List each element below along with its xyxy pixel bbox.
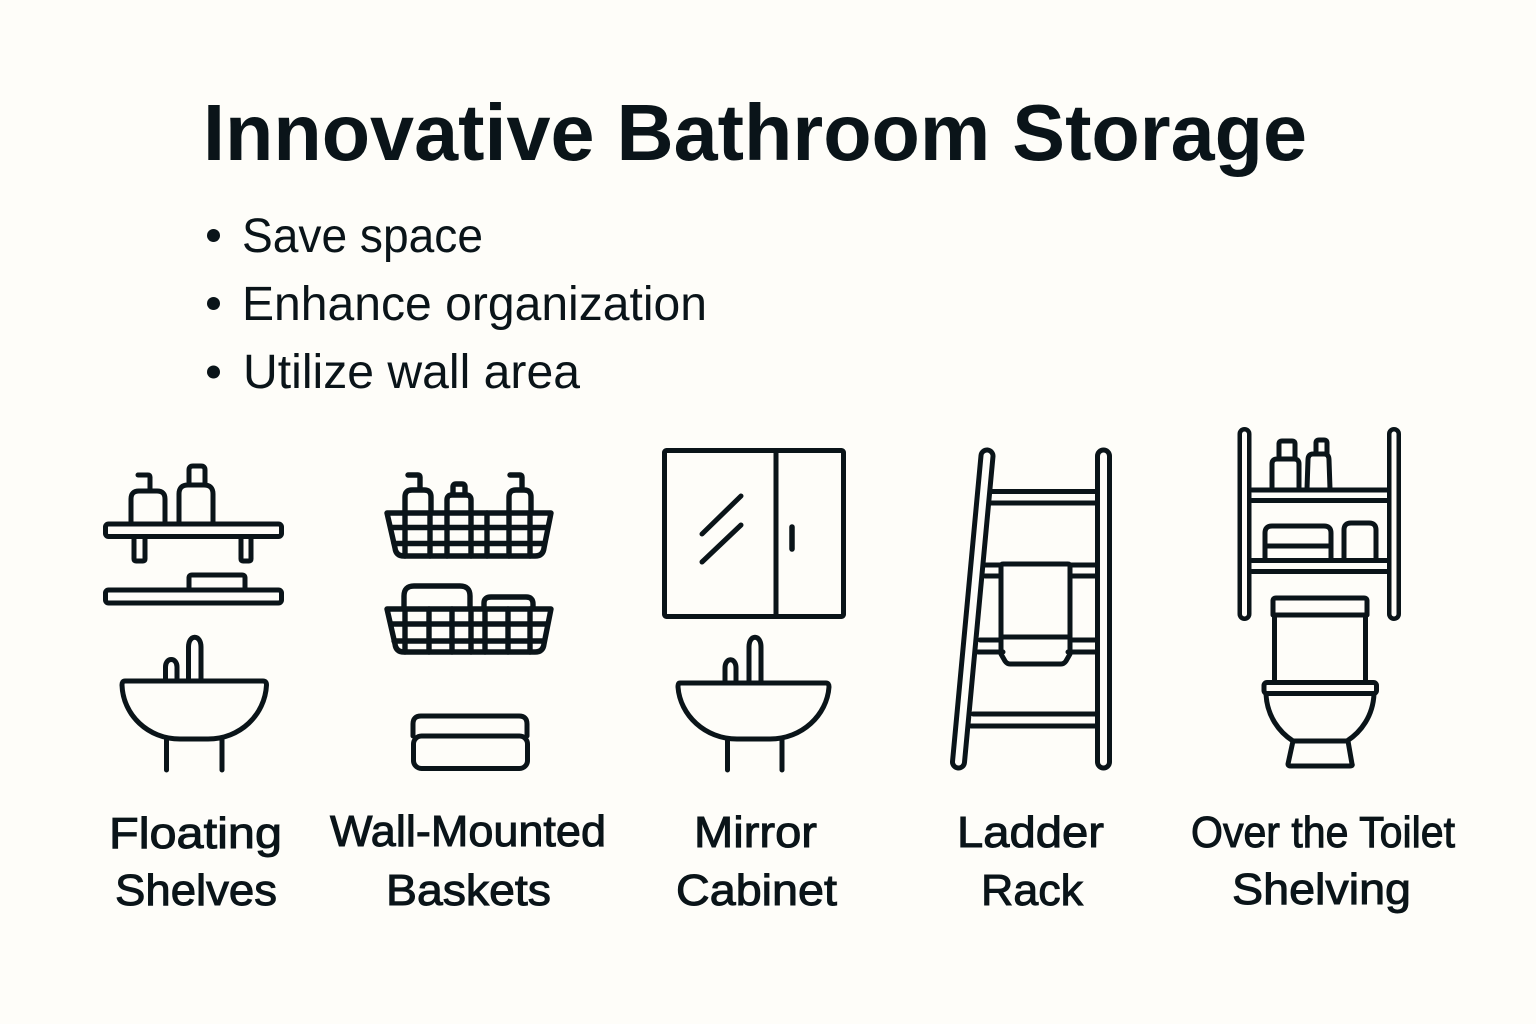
mirror glare [702, 496, 741, 562]
right rail [1095, 456, 1112, 762]
sink [122, 637, 266, 770]
shelves, bottles and towels [1252, 440, 1387, 572]
icon: floating shelves [106, 466, 282, 770]
label: mirror cabinet [676, 808, 837, 915]
lower shelf with soap [106, 575, 282, 603]
label: floating shelves [109, 809, 282, 915]
icon: wall-mounted baskets [387, 475, 551, 768]
title: Innovative Bathroom Storage [203, 88, 1307, 177]
label: over the toilet shelving: Shelving [1232, 865, 1411, 914]
rungs [971, 492, 1095, 726]
left rail [958, 456, 987, 762]
label: floating shelves: Shelves [115, 866, 277, 915]
door divider [774, 451, 778, 616]
bullet: utilize wall area: Utilize wall area [243, 346, 580, 399]
icon: mirror cabinet [664, 450, 844, 770]
toilet [1264, 598, 1376, 766]
upper basket [387, 513, 551, 556]
label: over the toilet shelving: Over the Toilet [1191, 808, 1455, 857]
label: wall-mounted baskets [330, 807, 606, 915]
left post [1238, 434, 1252, 614]
label: wall-mounted baskets: Wall-Mounted [330, 807, 606, 856]
lower basket [387, 609, 551, 652]
capped bottle [179, 466, 213, 522]
label: floating shelves: Floating [109, 809, 282, 858]
icon: ladder rack [958, 456, 1104, 762]
bullet list [207, 210, 707, 399]
label: wall-mounted baskets: Baskets [386, 866, 551, 915]
hanging towel [1001, 564, 1070, 664]
bullet: enhance organization: Enhance organization [242, 278, 707, 331]
label: ladder rack: Rack [981, 866, 1084, 915]
door handle [789, 527, 795, 549]
label: over the toilet shelving [1191, 808, 1455, 914]
label: ladder rack: Ladder [957, 808, 1104, 857]
pump bottle [131, 475, 165, 522]
upper shelf with brackets [106, 524, 282, 561]
cabinet frame [664, 450, 844, 616]
right post [1387, 434, 1401, 614]
label: mirror cabinet: Cabinet [676, 866, 837, 915]
sink [678, 637, 829, 770]
icon: over-the-toilet shelving [1244, 434, 1394, 766]
lower basket items [404, 586, 470, 607]
label: mirror cabinet: Mirror [694, 808, 817, 857]
bullet: save space: Save space [242, 210, 483, 263]
upper basket items [405, 475, 431, 512]
label: ladder rack [957, 808, 1104, 915]
folded towel [413, 716, 528, 768]
